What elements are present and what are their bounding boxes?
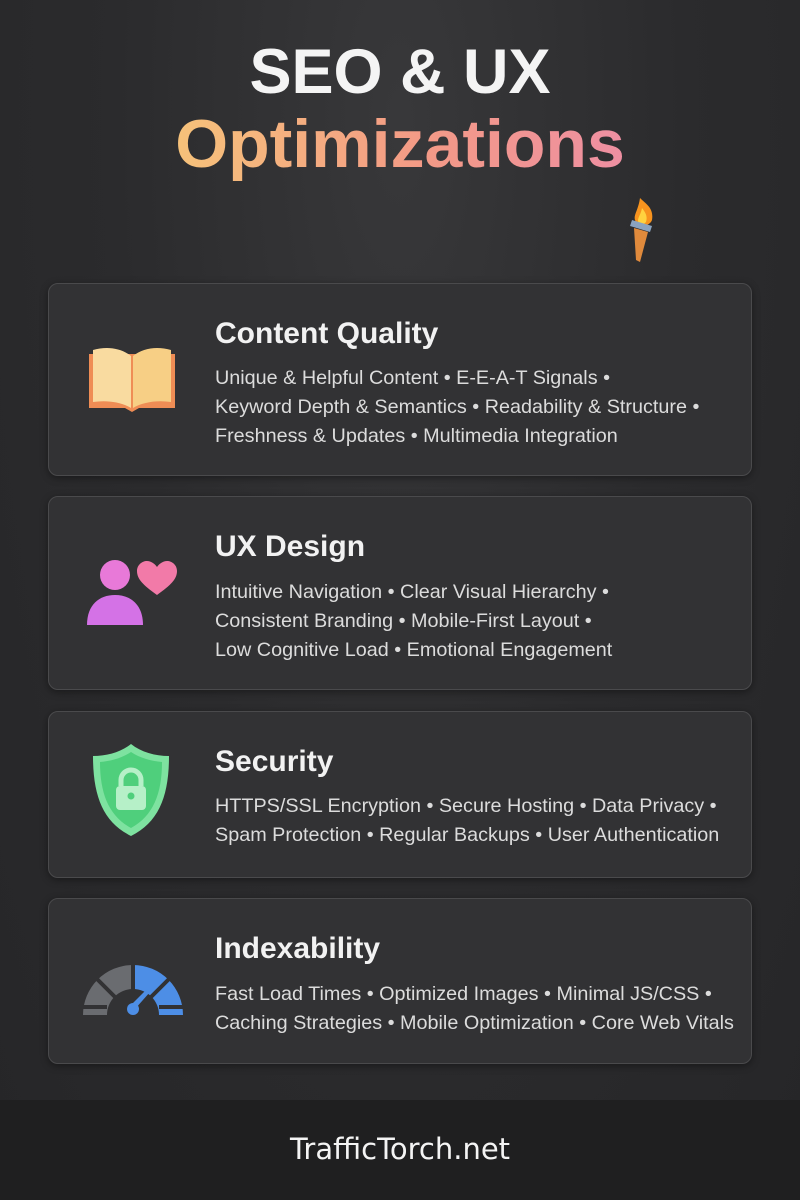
panel: ux design xyxy=(48,496,752,690)
text xyxy=(215,367,699,447)
title line 1: SEO & UX xyxy=(249,37,551,107)
text: Fast Load Times • Optimized Images • Minimal JS/CSS • xyxy=(215,983,712,1005)
text: Keyword Depth & Semantics • Readability & Structure • xyxy=(215,396,699,418)
icon: book xyxy=(89,348,175,412)
panel: indexability xyxy=(48,898,752,1064)
text xyxy=(215,983,734,1034)
icon: speedometer xyxy=(83,965,183,1015)
text: Unique & Helpful Content • E-E-A-T Signals • xyxy=(215,367,610,389)
text: Spam Protection • Regular Backups • User Authentication xyxy=(215,824,719,846)
heading: UX Design xyxy=(215,530,365,563)
icon: torch xyxy=(630,198,652,262)
text: Consistent Branding • Mobile-First Layout • xyxy=(215,610,592,632)
icon: shield lock xyxy=(93,744,169,836)
panel: security xyxy=(48,711,752,878)
text: Caching Strategies • Mobile Optimization • Core Web Vitals xyxy=(215,1012,734,1034)
panel: content quality xyxy=(48,283,752,476)
footer: TrafficTorch.net xyxy=(290,1132,510,1166)
text xyxy=(215,795,719,846)
text: Low Cognitive Load • Emotional Engagement xyxy=(215,639,612,661)
text: Freshness & Updates • Multimedia Integration xyxy=(215,425,618,447)
footer xyxy=(0,1100,800,1200)
title line 2: Optimizations xyxy=(175,106,625,182)
heading: Indexability xyxy=(215,932,380,965)
text: Intuitive Navigation • Clear Visual Hierarchy • xyxy=(215,581,609,603)
heading: Security xyxy=(215,745,333,778)
text: HTTPS/SSL Encryption • Secure Hosting • Data Privacy • xyxy=(215,795,717,817)
icon: person heart xyxy=(87,560,177,625)
text xyxy=(215,581,612,661)
heading: Content Quality xyxy=(215,317,438,350)
